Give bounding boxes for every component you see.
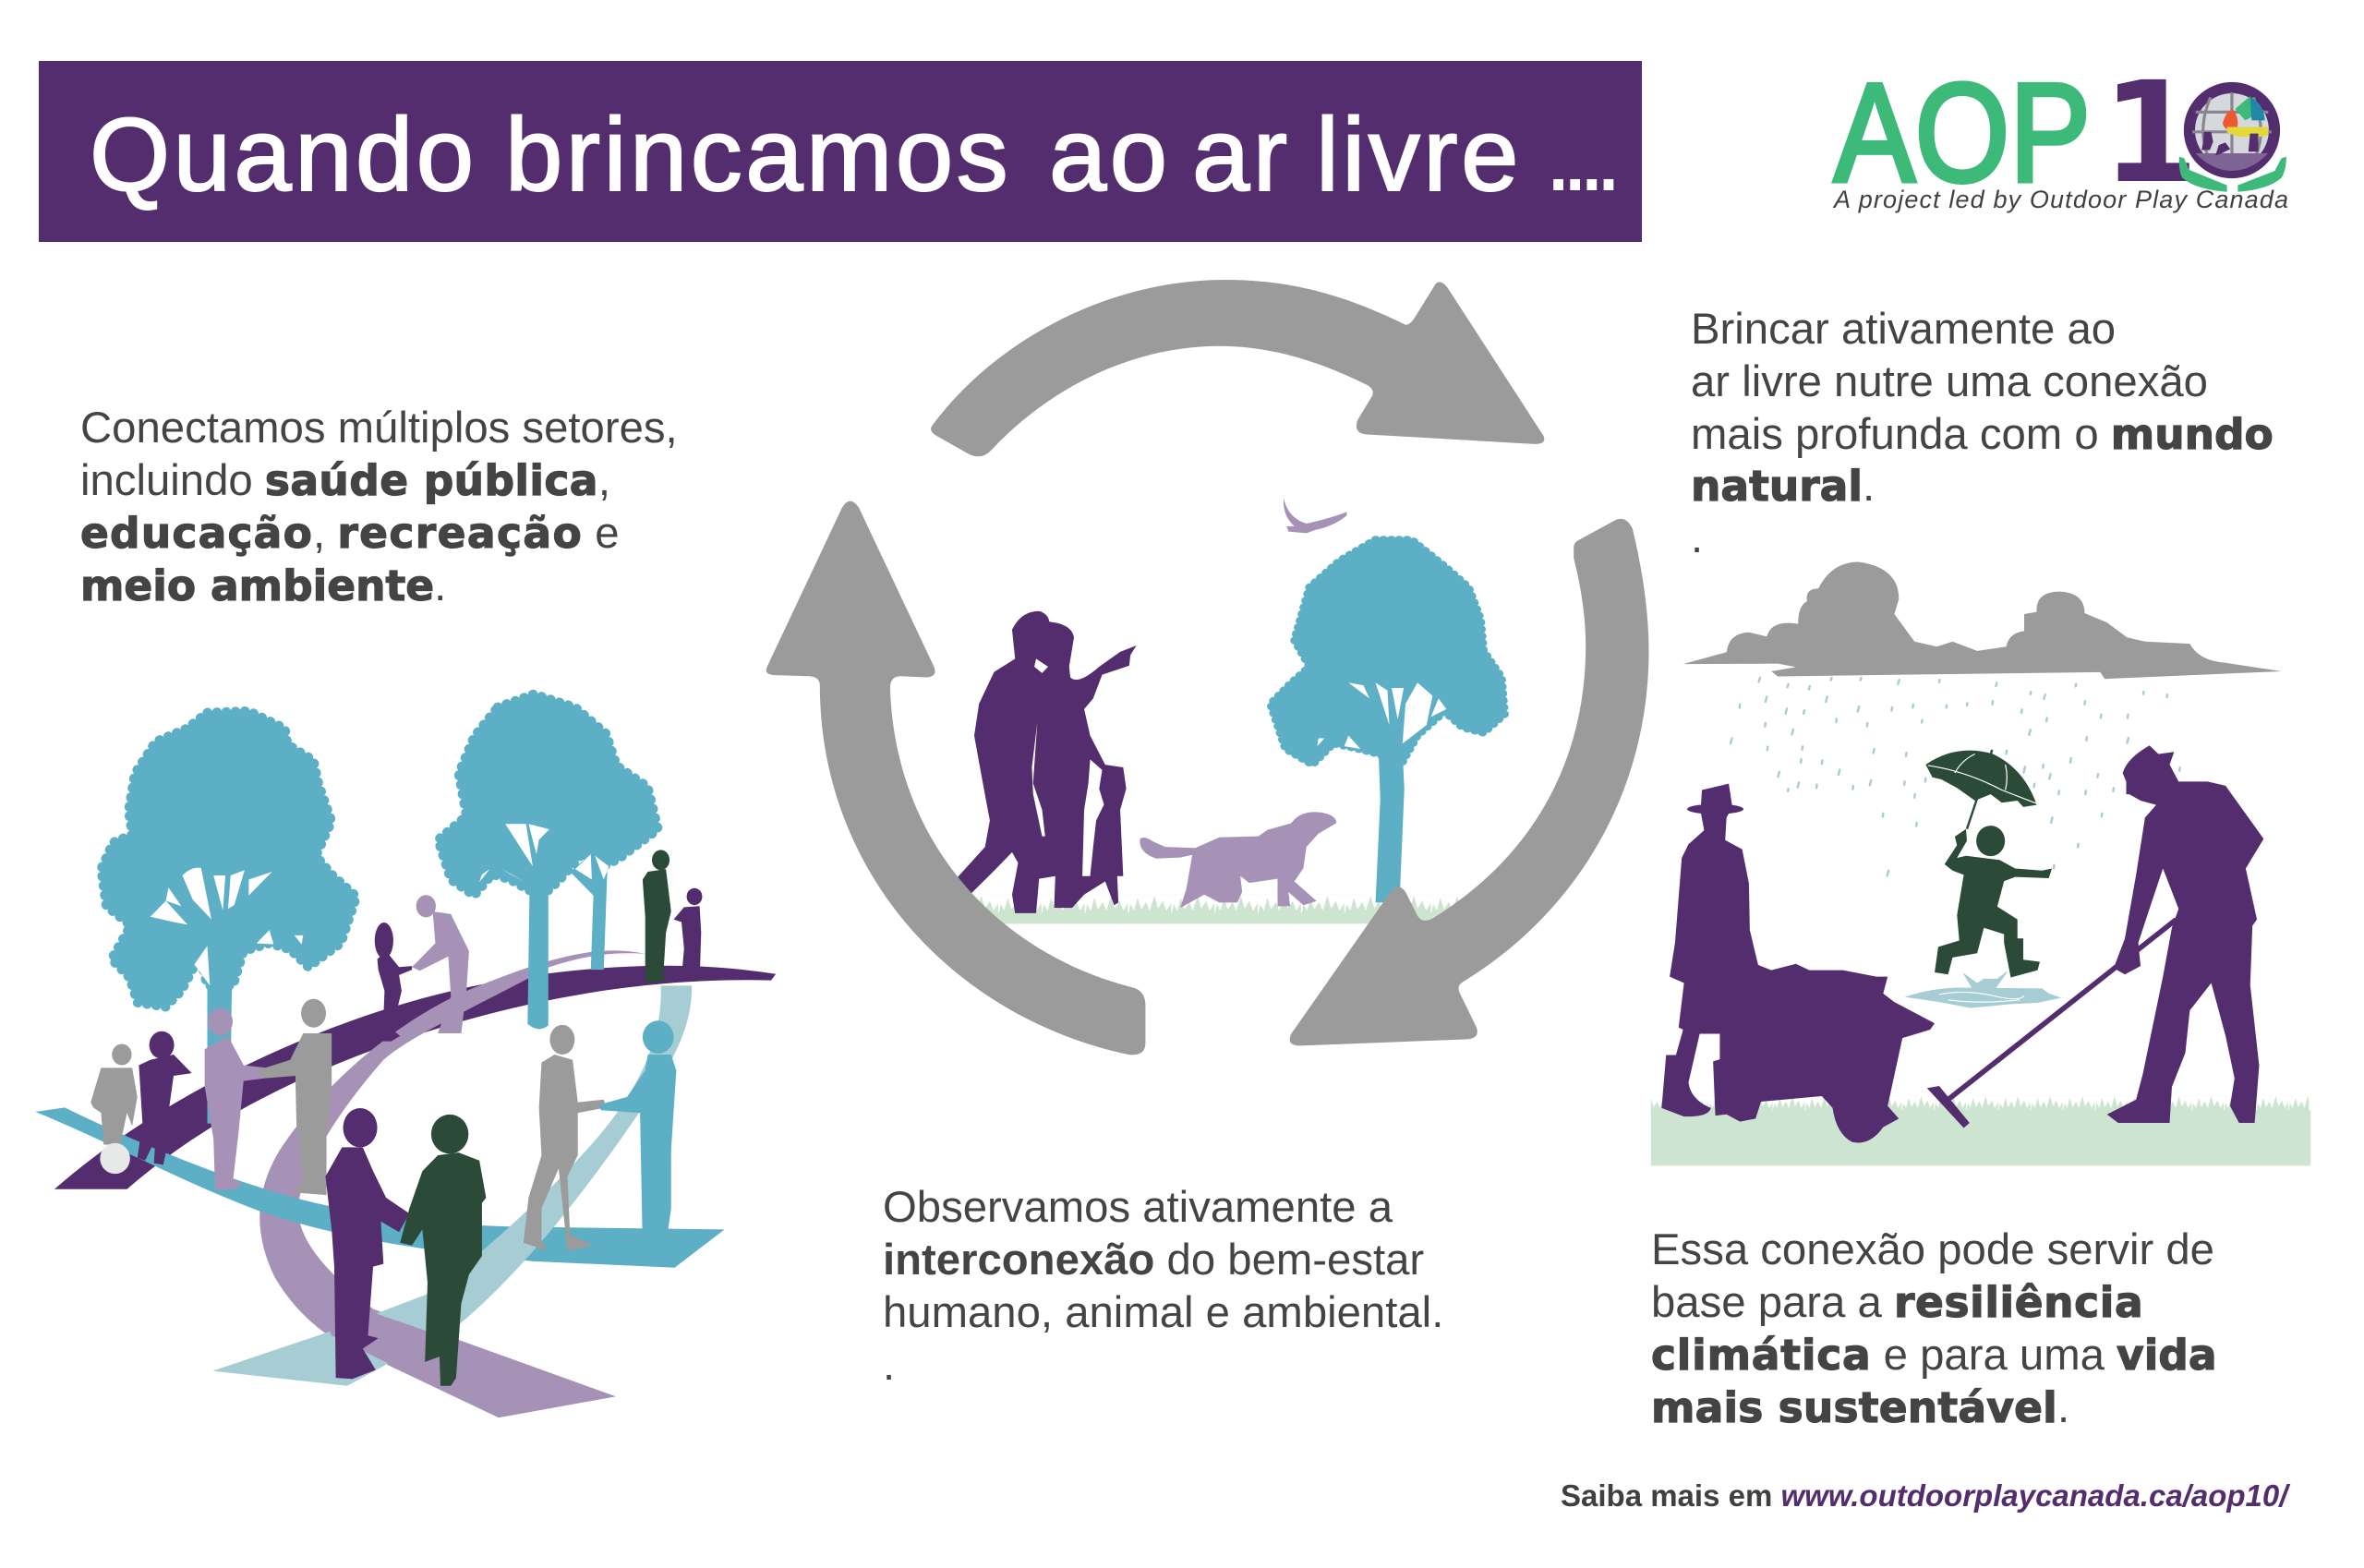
text block: climate resilience: base para a [1651, 1278, 1894, 1327]
logo: AOP10: 1 [2102, 52, 2199, 214]
wheelbarrow [1713, 964, 1935, 1142]
puddle [1905, 971, 2061, 1008]
text block: interconnection: Observamos ativamente a [883, 1183, 1393, 1232]
text block: nature connection: mais profunda com o [1691, 410, 2111, 459]
title: ar [1192, 97, 1322, 212]
person: woman with hat [1661, 784, 1778, 1116]
text block: nature connection: . [1863, 462, 1875, 511]
cloud [1683, 561, 2282, 679]
illustration: climate scene [1651, 561, 2310, 1165]
person: child with ball [90, 1043, 138, 1145]
rake [1927, 920, 2177, 1128]
ribbon crossing [321, 1309, 616, 1417]
child jumping [1935, 826, 2052, 977]
text block: climate resilience: e para uma vida [1884, 1331, 2217, 1380]
illustration: connected sectors [35, 694, 776, 1417]
text block: climate resilience: climática [1651, 1331, 1871, 1380]
text block: nature connection: Brincar ativamente ao [1691, 305, 2116, 354]
text block: sectors: . [434, 561, 446, 610]
ribbon: light purple [259, 950, 645, 1417]
person: large purple man [325, 1108, 409, 1379]
family silhouette [956, 611, 1137, 913]
text block: sectors: incluindo [80, 456, 265, 505]
title: livre [1316, 97, 1522, 212]
text block: nature connection: . [1691, 513, 1703, 562]
illustration: cycle with family, dog and tree [766, 280, 1649, 1055]
ribbon: light teal [212, 985, 692, 1386]
person: teal woman [598, 1020, 676, 1246]
person: large green woman [400, 1115, 486, 1386]
tree: left [101, 711, 356, 1124]
title banner [39, 61, 1642, 242]
text block: interconnection: . [883, 1341, 895, 1390]
text block: climate resilience: Essa conexão pode servir de [1651, 1225, 2214, 1274]
person: girl [138, 1031, 192, 1164]
text block: climate resilience: resiliência [1894, 1278, 2143, 1327]
text block: nature connection: mundo [2111, 410, 2274, 459]
icon: bird [1284, 498, 1346, 533]
logo: AOP10: AOP [1834, 54, 2091, 211]
text block: sectors: , recreação e [313, 509, 620, 558]
icon: ball [100, 1143, 130, 1174]
tree [1271, 539, 1504, 902]
person: grey man [524, 1025, 607, 1250]
umbrella [1925, 750, 2037, 829]
logo: AOP10 [1832, 52, 2288, 214]
text block: nature connection: natural [1691, 462, 1863, 511]
arrow: top [931, 280, 1544, 456]
text block: climate resilience: . [2057, 1383, 2069, 1432]
text block: interconnection: do bem-estar [1154, 1236, 1424, 1285]
ribbon: dark purple [54, 966, 776, 1189]
text block: interconnection: humano, animal e ambiental. [883, 1288, 1443, 1337]
rain [1731, 678, 2180, 875]
person: man with hat [2107, 745, 2263, 1123]
grass [976, 895, 1463, 923]
title: ao [1049, 97, 1202, 212]
title: .... [1544, 97, 1613, 212]
text block: sectors: saúde pública, [265, 456, 610, 505]
text block: sectors: Conectamos múltiplos setores, [80, 404, 678, 452]
title: Quando [90, 97, 509, 212]
arrow: right [1290, 519, 1649, 1045]
person: light purple adult [205, 1007, 267, 1189]
tagline: A project led by Outdoor Play Canada [1832, 186, 2288, 213]
ribbon: teal [35, 1107, 725, 1268]
text block: climate resilience: mais sustentável [1651, 1383, 2057, 1432]
person: grey adult [257, 999, 332, 1195]
footer link: Saiba mais em www.outdoorplaycanada.ca/aop10/ [1561, 1478, 2291, 1513]
text block: sectors: meio ambiente [80, 561, 434, 610]
text block: interconnection: interconexão [883, 1236, 1154, 1285]
text block: sectors: educação [80, 509, 313, 558]
tree: right [438, 694, 658, 1029]
person: bending adult [412, 895, 469, 1033]
text block: nature connection: ar livre nutre uma conexão [1691, 357, 2208, 406]
person: green man [643, 850, 671, 983]
title: brincamos [505, 97, 1043, 212]
arrow: left [766, 501, 1145, 1055]
person: girl with long hair [375, 923, 412, 1042]
person: purple child [674, 888, 702, 981]
dog [1140, 812, 1336, 908]
ground grass [1651, 1095, 2310, 1165]
